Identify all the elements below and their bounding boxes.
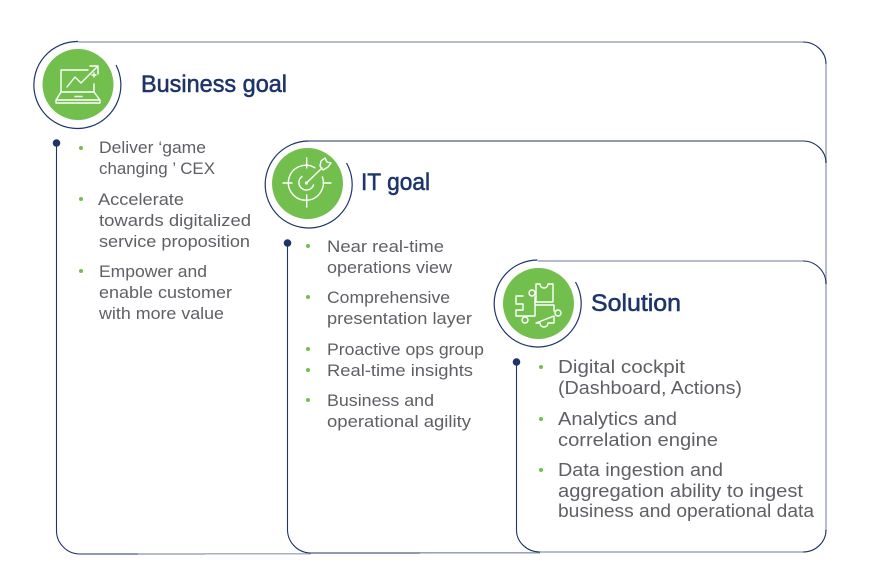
heading: solution: Solution <box>591 290 681 317</box>
list: solution: Data ingestion and <box>558 459 723 480</box>
icon ring: business goal <box>34 41 121 128</box>
heading: IT goal: IT goal <box>361 169 430 196</box>
list: business goal: service proposition <box>99 232 250 251</box>
panel: solution <box>494 260 826 552</box>
list: solution: (Dashboard, Actions) <box>558 377 742 398</box>
frame: solution <box>538 260 803 262</box>
panel: business goal <box>34 41 826 554</box>
list: IT goal: Business and <box>327 391 434 410</box>
list: business goal: changing ’ CEX <box>99 159 215 178</box>
icon ring: solution <box>494 260 581 347</box>
list: IT goal: Near real-time <box>327 237 444 256</box>
connector dot: business goal <box>53 139 60 147</box>
list: business goal: with more value <box>98 304 224 323</box>
list: business goal: enable customer <box>99 283 232 302</box>
list: IT goal: operational agility <box>327 412 472 431</box>
list: solution <box>539 356 815 521</box>
connector dot: IT goal <box>284 239 291 247</box>
list: IT goal: Real-time insights <box>327 361 473 380</box>
panel: IT goal <box>265 141 826 553</box>
icon: puzzle pieces <box>503 268 574 339</box>
list: solution: Digital cockpit <box>558 356 685 377</box>
list: solution: correlation engine <box>558 429 718 450</box>
connector dot: solution <box>513 358 520 366</box>
list: IT goal: Comprehensive <box>327 288 450 307</box>
icon: target with arrow <box>272 148 343 219</box>
list: solution: business and operational data <box>558 500 815 521</box>
list: solution: Analytics and <box>558 408 677 429</box>
list: solution: aggregation ability to ingest <box>558 480 803 501</box>
frame: business goal <box>56 143 138 554</box>
list: business goal <box>79 138 251 323</box>
list: business goal: Accelerate <box>98 190 184 209</box>
frame: IT goal <box>288 141 826 553</box>
list: IT goal: presentation layer <box>327 309 472 328</box>
list: business goal: Empower and <box>99 262 207 281</box>
list: IT goal <box>306 237 484 431</box>
heading: business goal: Business goal <box>141 71 287 98</box>
list: IT goal: operations view <box>327 258 453 277</box>
icon ring: IT goal <box>265 141 352 228</box>
list: business goal: towards digitalized <box>99 211 251 230</box>
list: IT goal: Proactive ops group <box>327 340 484 359</box>
icon: laptop with rising chart <box>42 49 114 120</box>
list: business goal: Deliver ‘game <box>99 138 206 157</box>
